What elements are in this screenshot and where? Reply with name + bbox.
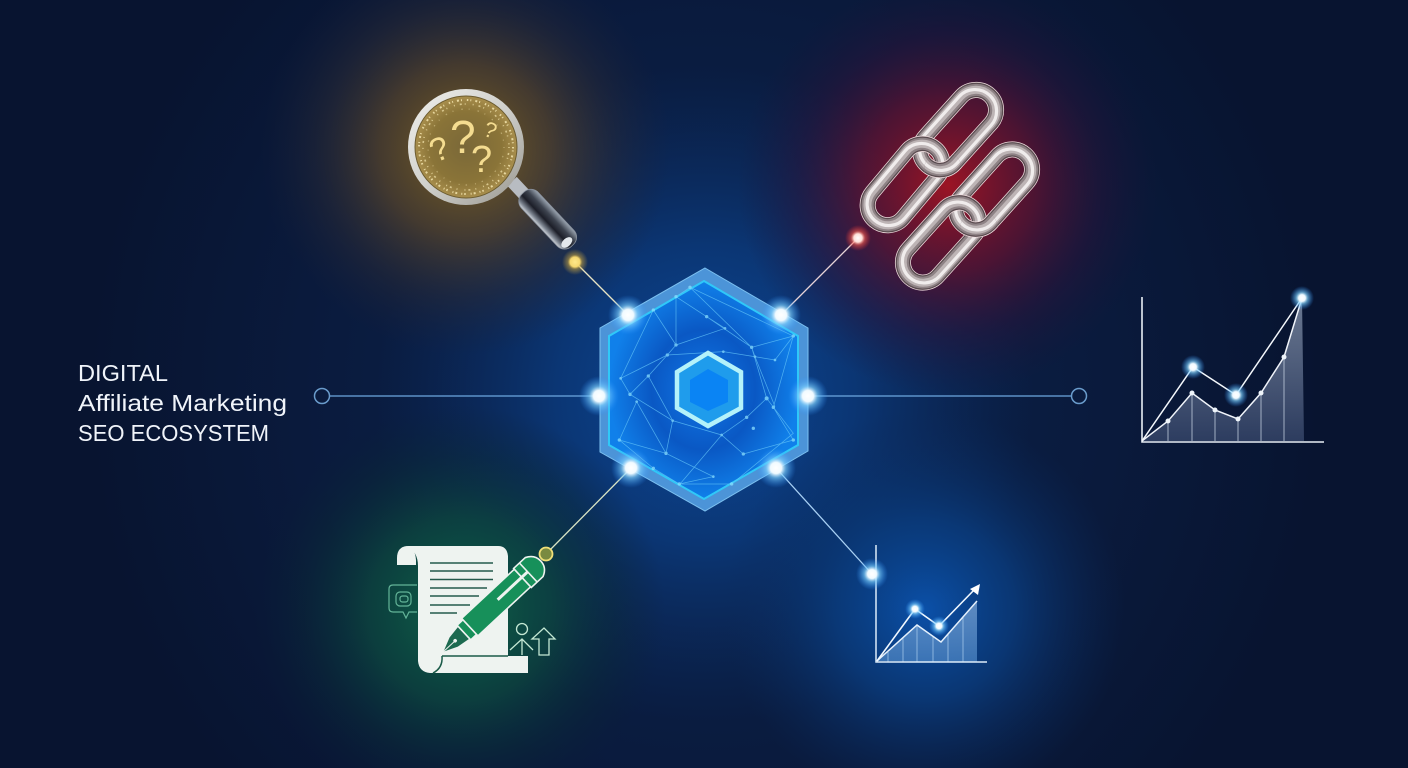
area (1142, 298, 1304, 441)
connector lines (330, 238, 1072, 574)
title text (78, 360, 287, 446)
question marks (424, 111, 500, 181)
red connector node (845, 225, 871, 251)
lines (877, 601, 977, 661)
upper line (1142, 298, 1302, 441)
question marks: ? (424, 128, 455, 169)
question marks: ? (471, 139, 492, 181)
scroll curl (397, 546, 416, 565)
lens data dots (419, 100, 513, 194)
title text: SEO ECOSYSTEM (78, 420, 269, 446)
yellow-green connector node (540, 548, 552, 560)
large line chart (1142, 286, 1324, 442)
axes (1142, 297, 1324, 442)
glowing points (1181, 286, 1314, 407)
hub nodes (579, 295, 828, 488)
growth arrows (510, 624, 555, 655)
inner hexagon (609, 281, 798, 499)
icon: document with fountain pen (389, 546, 555, 673)
blue connector node (856, 558, 888, 590)
small points (1166, 354, 1286, 424)
scroll fold (433, 656, 508, 673)
axes (876, 545, 987, 662)
handle (504, 173, 581, 253)
icon: magnifying glass with question marks (408, 89, 581, 253)
center hexagon icon (677, 353, 741, 426)
left ring terminal (314, 388, 330, 404)
yellow connector node (562, 249, 588, 275)
area (877, 601, 977, 662)
bars (1168, 357, 1284, 441)
network mesh (618, 286, 795, 486)
right ring terminal (1072, 388, 1086, 404)
lower line (1142, 298, 1302, 441)
icon: metal chain links (858, 81, 1041, 292)
arrow head (970, 584, 980, 595)
lens (408, 89, 524, 205)
outer hexagon band (600, 268, 808, 511)
chat bubble (389, 585, 417, 618)
small blue line chart (876, 545, 987, 662)
title text: Affiliate Marketing (78, 390, 287, 416)
question marks: ? (450, 111, 476, 163)
text lines (430, 563, 493, 613)
scroll paper (407, 546, 528, 673)
title text: DIGITAL (78, 360, 168, 386)
bars (888, 617, 963, 662)
question marks: ? (480, 116, 500, 144)
fountain pen (433, 551, 550, 663)
points (905, 599, 925, 619)
central hexagon hub (600, 268, 808, 511)
